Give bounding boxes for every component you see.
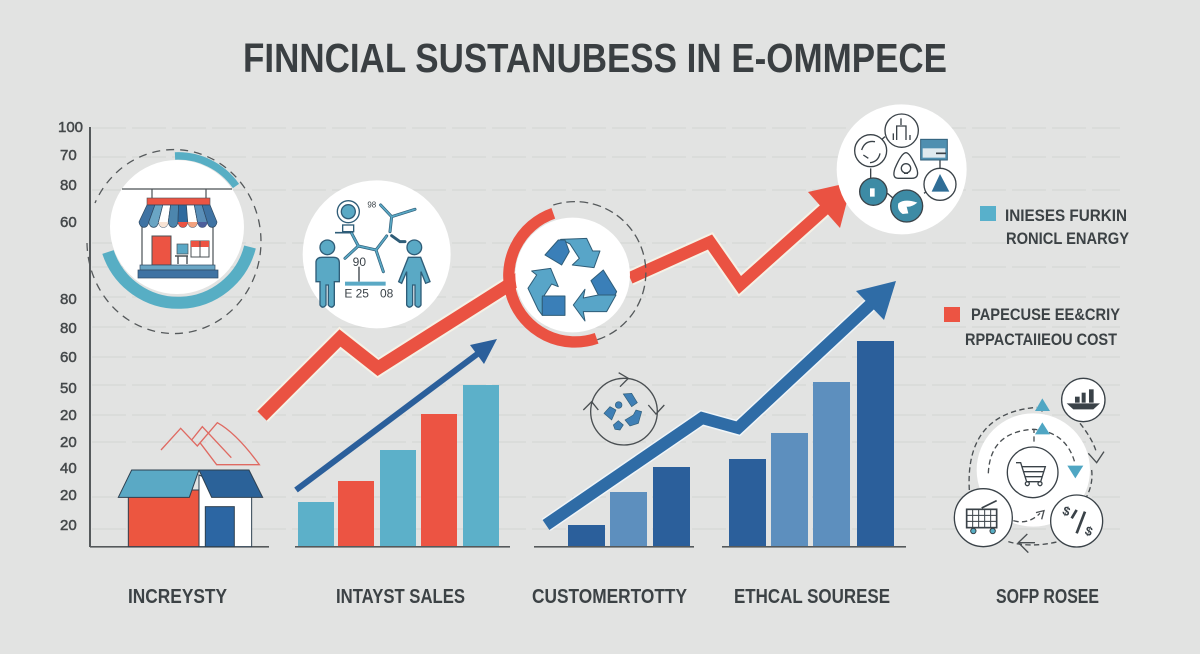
y axis: 60: [60, 214, 77, 231]
bar chart: sales: [298, 385, 499, 546]
y axis: 40: [60, 460, 77, 477]
baseline axes: [90, 546, 906, 548]
y axis: 60: [60, 349, 77, 366]
icon: ideas and people circle: 08: [380, 286, 394, 300]
icon: connected finance icons circle: [837, 104, 967, 234]
icon: storefront with progress ring: [87, 150, 261, 334]
category labels: [128, 586, 1099, 608]
arrow: small blue trend: [296, 339, 497, 490]
bar chart: ethical sourcing: [729, 341, 894, 546]
title: FINNCIAL SUSTANUBESS IN E-OMMPECE: [243, 35, 947, 81]
legend: red entry: RPPACTAIIEOU COST: [965, 330, 1118, 349]
y axis: 20: [60, 517, 77, 534]
icon: recycling circle with red ring: [509, 202, 646, 342]
icon: ideas and people circle: [303, 180, 451, 328]
legend: teal entry: INIESES FURKIN: [1005, 206, 1127, 225]
legend: red entry: PAPECUSE EE&CRIY: [971, 305, 1121, 324]
y axis: [58, 119, 91, 547]
arrow: large blue trend line: [546, 281, 896, 525]
icon: ideas and people circle: 90: [353, 255, 366, 269]
category labels: CUSTOMERTOTTY: [532, 586, 688, 608]
icon: shopping cycle: $: [1061, 504, 1072, 519]
icon: shopping cycle: $: [1083, 524, 1094, 539]
y axis: 80: [60, 320, 77, 337]
category labels: ETHCAL SOURESE: [734, 586, 890, 608]
legend: teal entry: RONICL ENARGY: [1006, 229, 1130, 248]
y axis: 70: [60, 147, 77, 164]
y axis: 20: [60, 434, 77, 451]
icon: shopping cycle: [954, 378, 1105, 553]
icon: ideas and people circle: E 25: [344, 286, 369, 300]
y axis: 50: [60, 380, 77, 397]
category labels: SOFP ROSEE: [996, 586, 1099, 608]
y axis: 80: [60, 177, 77, 194]
arrow: red trend line: [262, 182, 852, 416]
legend: red entry: [944, 305, 1121, 349]
y axis: 20: [60, 487, 77, 504]
y axis: 20: [60, 407, 77, 424]
icon: small recycling loop: [583, 373, 664, 445]
category labels: INCREYSTY: [128, 586, 228, 608]
icon: ideas and people circle: 98: [367, 200, 377, 209]
bar chart: customer loyalty: [568, 467, 690, 546]
y axis: 100: [58, 119, 83, 136]
y axis: 80: [60, 291, 77, 308]
category labels: INTAYST SALES: [336, 586, 465, 608]
icon: house with red sketch: [118, 423, 263, 547]
legend: teal entry: [980, 206, 1130, 248]
